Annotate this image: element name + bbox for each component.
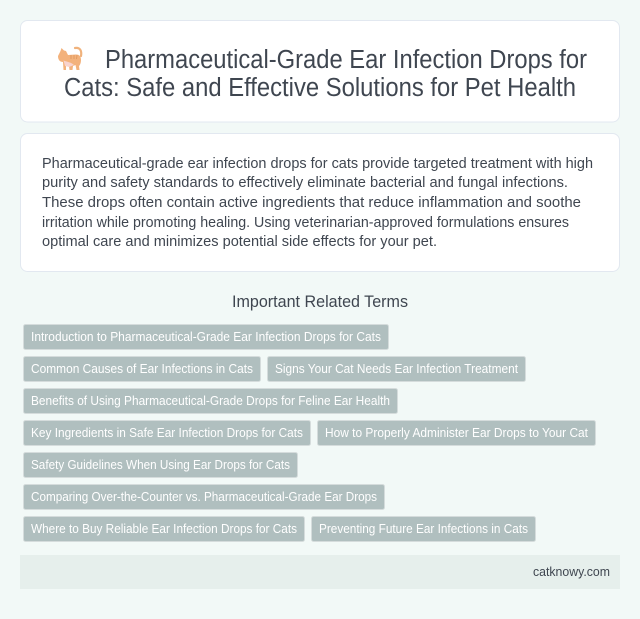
- title: Pharmaceutical-Grade Ear Infection Drops for: [105, 46, 587, 74]
- tag: Common Causes of Ear Infections in Cats: [31, 361, 253, 376]
- heading: important related terms: Important Related Terms: [232, 293, 408, 311]
- tag: Comparing Over-the-Counter vs. Pharmaceutical-Grade Ear Drops: [31, 489, 377, 504]
- tag: [24, 356, 260, 382]
- tag: Key Ingredients in Safe Ear Infection Drops for Cats: [31, 425, 303, 440]
- description text: [42, 156, 593, 250]
- tag: [24, 452, 298, 478]
- description text: purity and safety standards to effectively eliminate bacterial and fungal infections.: [42, 175, 568, 191]
- description text: Pharmaceutical-grade ear infection drops for cats provide targeted treatment with high: [42, 156, 593, 172]
- tag: [268, 356, 526, 382]
- tag: [24, 324, 388, 350]
- tag: [24, 516, 304, 542]
- description text: These drops often contain active ingredients that reduce inflammation and soothe: [42, 195, 581, 211]
- tag: Safety Guidelines When Using Ear Drops for Cats: [31, 457, 290, 472]
- title: [64, 46, 587, 102]
- description text: optimal care and minimizes potential side effects for your pet.: [42, 234, 437, 250]
- panel: description card: [20, 134, 620, 272]
- tag: [318, 420, 596, 446]
- panel: title card: [20, 20, 620, 122]
- tag: Benefits of Using Pharmaceutical-Grade Drops for Feline Ear Health: [31, 393, 390, 408]
- footer: catknowy.com: [533, 564, 610, 579]
- related term tags: [24, 324, 596, 542]
- tag: Signs Your Cat Needs Ear Infection Treatment: [275, 361, 518, 376]
- tag: Where to Buy Reliable Ear Infection Drops for Cats: [31, 521, 297, 536]
- tag: [24, 484, 384, 510]
- description text: irritation while promoting healing. Using veterinarian-approved formulations ensures: [42, 215, 569, 231]
- tag: [24, 420, 310, 446]
- tag: [312, 516, 536, 542]
- tag: Introduction to Pharmaceutical-Grade Ear Infection Drops for Cats: [31, 329, 381, 344]
- title: Cats: Safe and Effective Solutions for Pet Health: [64, 74, 576, 102]
- icon: cat: [58, 48, 81, 70]
- footer: [20, 555, 620, 589]
- tag: Preventing Future Ear Infections in Cats: [319, 521, 528, 536]
- tag: How to Properly Administer Ear Drops to Your Cat: [325, 425, 588, 440]
- tag: [24, 388, 398, 414]
